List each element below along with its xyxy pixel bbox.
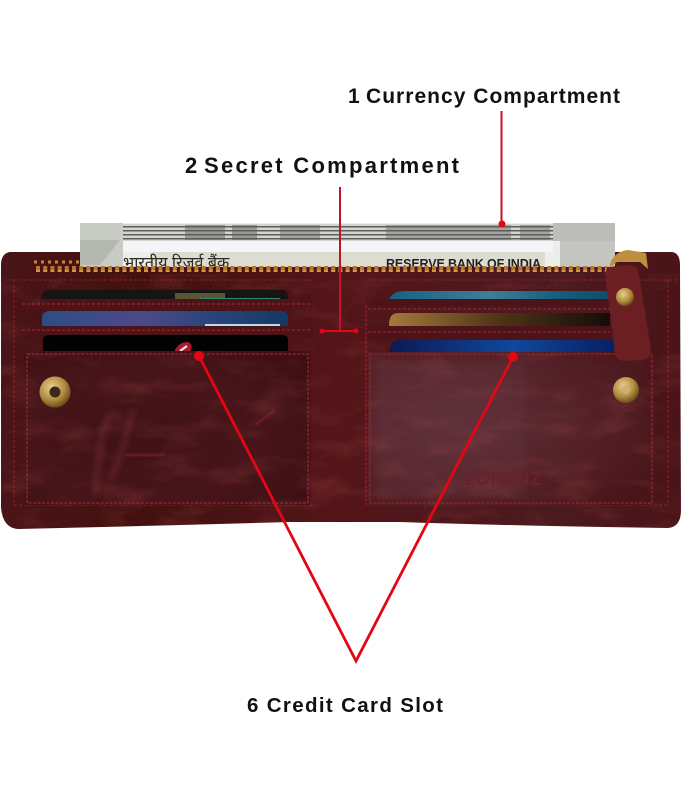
right card slots xyxy=(365,291,615,505)
callout: currency compartment: 1 xyxy=(348,85,360,108)
infographic: wallet compartments xyxy=(1,88,681,712)
right pocket xyxy=(368,352,655,505)
left pocket xyxy=(24,351,310,505)
right snap button xyxy=(613,377,639,403)
zipper pull xyxy=(605,250,651,361)
leather grain texture xyxy=(0,252,683,530)
left snap button xyxy=(40,376,70,408)
zipper teeth xyxy=(36,269,607,271)
callout: secret compartment xyxy=(185,153,460,334)
banknote: RESERVE BANK OF INDIA xyxy=(386,257,541,271)
callout: secret compartment: Secret Compartment xyxy=(204,153,460,178)
callout: credit card slots xyxy=(194,351,518,717)
brand deboss: LORENZ xyxy=(464,469,542,489)
wallet body xyxy=(1,252,681,529)
banknote: भारतीय रिज़र्व बैंक xyxy=(123,253,230,272)
left card slots xyxy=(20,290,313,353)
callout: currency compartment xyxy=(348,85,620,228)
callout: currency compartment: Currency Compartment xyxy=(366,85,620,108)
callout: credit card slots: 6 Credit Card Slot xyxy=(247,694,443,717)
callout: secret compartment: 2 xyxy=(185,153,197,178)
banknote xyxy=(80,223,615,272)
